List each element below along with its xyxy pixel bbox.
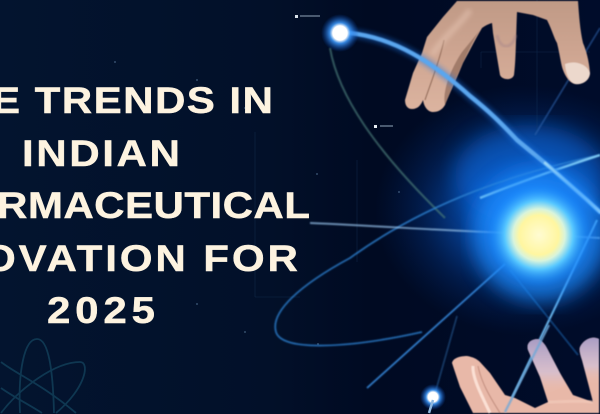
glowing node: bottom (420, 384, 446, 413)
faint grid lines (255, 0, 590, 297)
glowing sun (474, 169, 600, 301)
icon: atom watermark (1, 339, 85, 413)
small data markers (295, 15, 393, 128)
hand: lower (452, 338, 599, 413)
orbit: large ellipse (275, 155, 600, 346)
title: INDIAN (22, 133, 180, 174)
title: 2025 (47, 290, 155, 331)
hand: upper (405, 1, 590, 112)
glowing node: top (321, 14, 359, 52)
title: RMACEUTICAL (0, 185, 310, 226)
title (0, 80, 310, 331)
faint stars (114, 61, 400, 345)
blue glow (375, 85, 600, 335)
beam over lower hand (505, 325, 549, 412)
light beams (310, 28, 600, 412)
orbit: faint grey arc (330, 48, 445, 218)
title: E TRENDS IN (0, 80, 273, 121)
main glowing arc (350, 33, 600, 212)
